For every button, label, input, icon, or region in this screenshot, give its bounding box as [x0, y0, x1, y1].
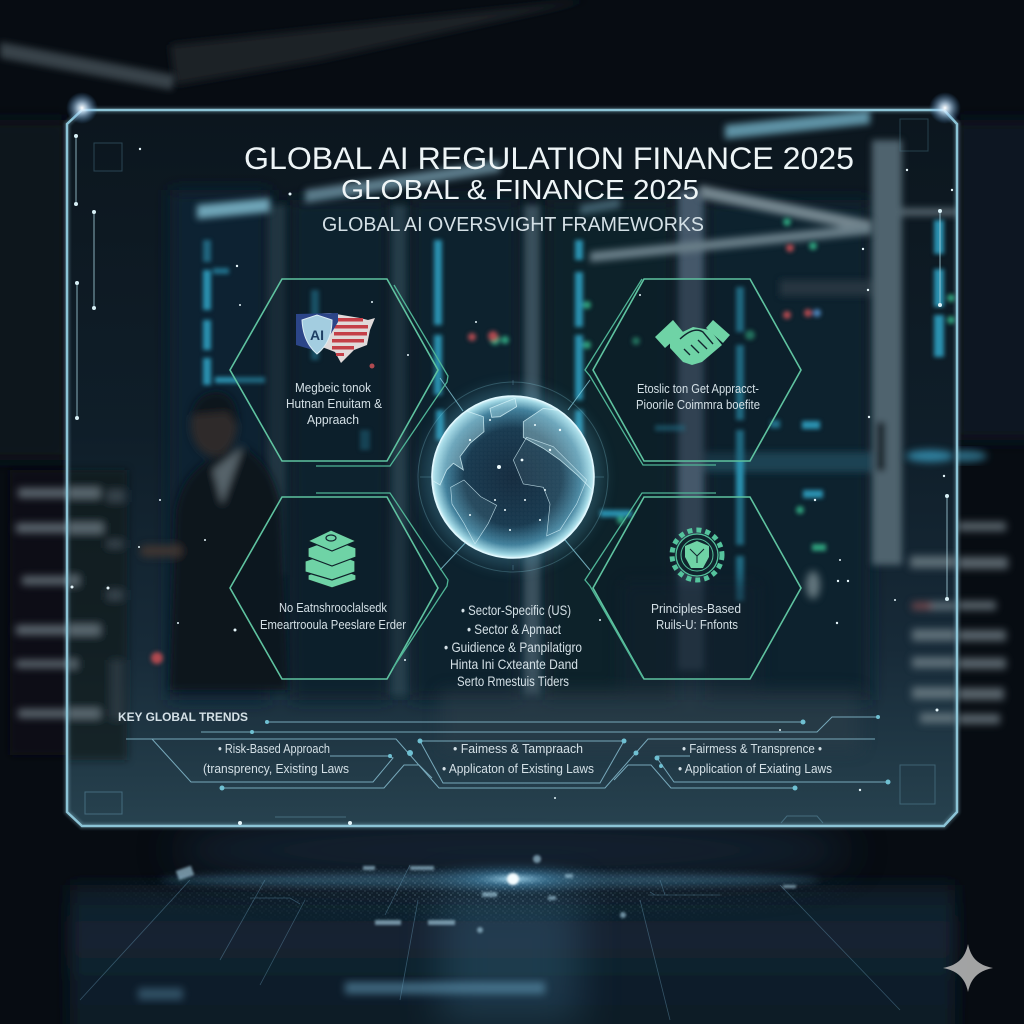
hexagon text [651, 602, 741, 632]
hexagon text: Principles-Based [651, 602, 741, 616]
hexagon text [636, 382, 760, 412]
globe [423, 387, 603, 567]
trends circuit panel [126, 715, 890, 790]
text block: sector-specific: • Sector-Specific (US) [461, 602, 571, 618]
trend 1 text: (transprency, Existing Laws [203, 761, 349, 776]
hexagon text: Emeartrooula Peeslare Erder [260, 618, 406, 632]
hexagon text: Ruils-U: Fnfonts [656, 618, 738, 632]
subtitle: GLOBAL AI OVERSVIGHT FRAMEWORKS [322, 214, 704, 236]
trend 1 text: • Risk-Based Approach [218, 741, 330, 756]
floor: glowing circuit grid [70, 855, 955, 1024]
trend 1 text [203, 741, 349, 776]
heading: key global trends: KEY GLOBAL TRENDS [118, 710, 248, 724]
corner flares [0, 92, 1024, 124]
continents [430, 393, 600, 550]
text block: sector-specific: • Sector & Apmact [467, 621, 561, 637]
hexagon text [286, 381, 383, 427]
icon: sparkle watermark [943, 944, 993, 992]
text block: sector-specific: Hinta Ini Cxteante Dand [450, 656, 578, 672]
blurred server room seen through glass [68, 111, 956, 764]
text block: sector-specific: • Guidience & Panpilatigro [444, 639, 582, 655]
icon: gear with lion [672, 530, 722, 580]
trend 2 text: • Applicaton of Existing Laws [442, 761, 594, 776]
title line 1: GLOBAL AI REGULATION FINANCE 2025 [244, 140, 854, 176]
trend 3 text: • Application of Exiating Laws [678, 761, 832, 776]
blurred shelves seen through glass [67, 450, 957, 760]
trend 3 text: • Fairmess & Transprence • [682, 741, 822, 756]
hexagon text: Pioorile Coimmra boefite [636, 398, 760, 412]
text block: sector-specific [444, 602, 582, 689]
trend 2 text [442, 741, 594, 776]
title block [244, 140, 854, 236]
icon: US flag map with AI shield: AI [310, 327, 324, 343]
text block: sector-specific: Serto Rmestuis Tiders [457, 673, 569, 689]
hexagon text: Appraach [307, 413, 359, 427]
hexagon text [260, 601, 406, 632]
trend 2 text: • Faimess & Tampraach [453, 741, 583, 756]
glass panel [67, 110, 958, 866]
panel: hexagon top right [585, 279, 801, 465]
icon: US flag map with AI shield [296, 313, 375, 368]
panel: hexagon bottom right [585, 493, 801, 679]
connector lines to globe [418, 378, 608, 572]
panel: hexagon top left [230, 279, 448, 466]
icon: handshake [655, 320, 730, 365]
hexagon text: Hutnan Enuitam & [286, 397, 383, 411]
trend 3 text [678, 741, 832, 776]
particles [70, 148, 953, 825]
panel frame [67, 110, 957, 826]
hexagon text: Etoslic ton Get Appracct- [637, 382, 759, 396]
title line 2: GLOBAL & FINANCE 2025 [341, 174, 699, 205]
icon: stack of banknotes [305, 530, 356, 588]
panel: hexagon bottom left [230, 493, 448, 679]
hexagon text: Megbeic tonok [295, 381, 372, 395]
blurred person [140, 392, 288, 690]
hexagon text: No Eatnshrooclalsedk [279, 601, 388, 615]
